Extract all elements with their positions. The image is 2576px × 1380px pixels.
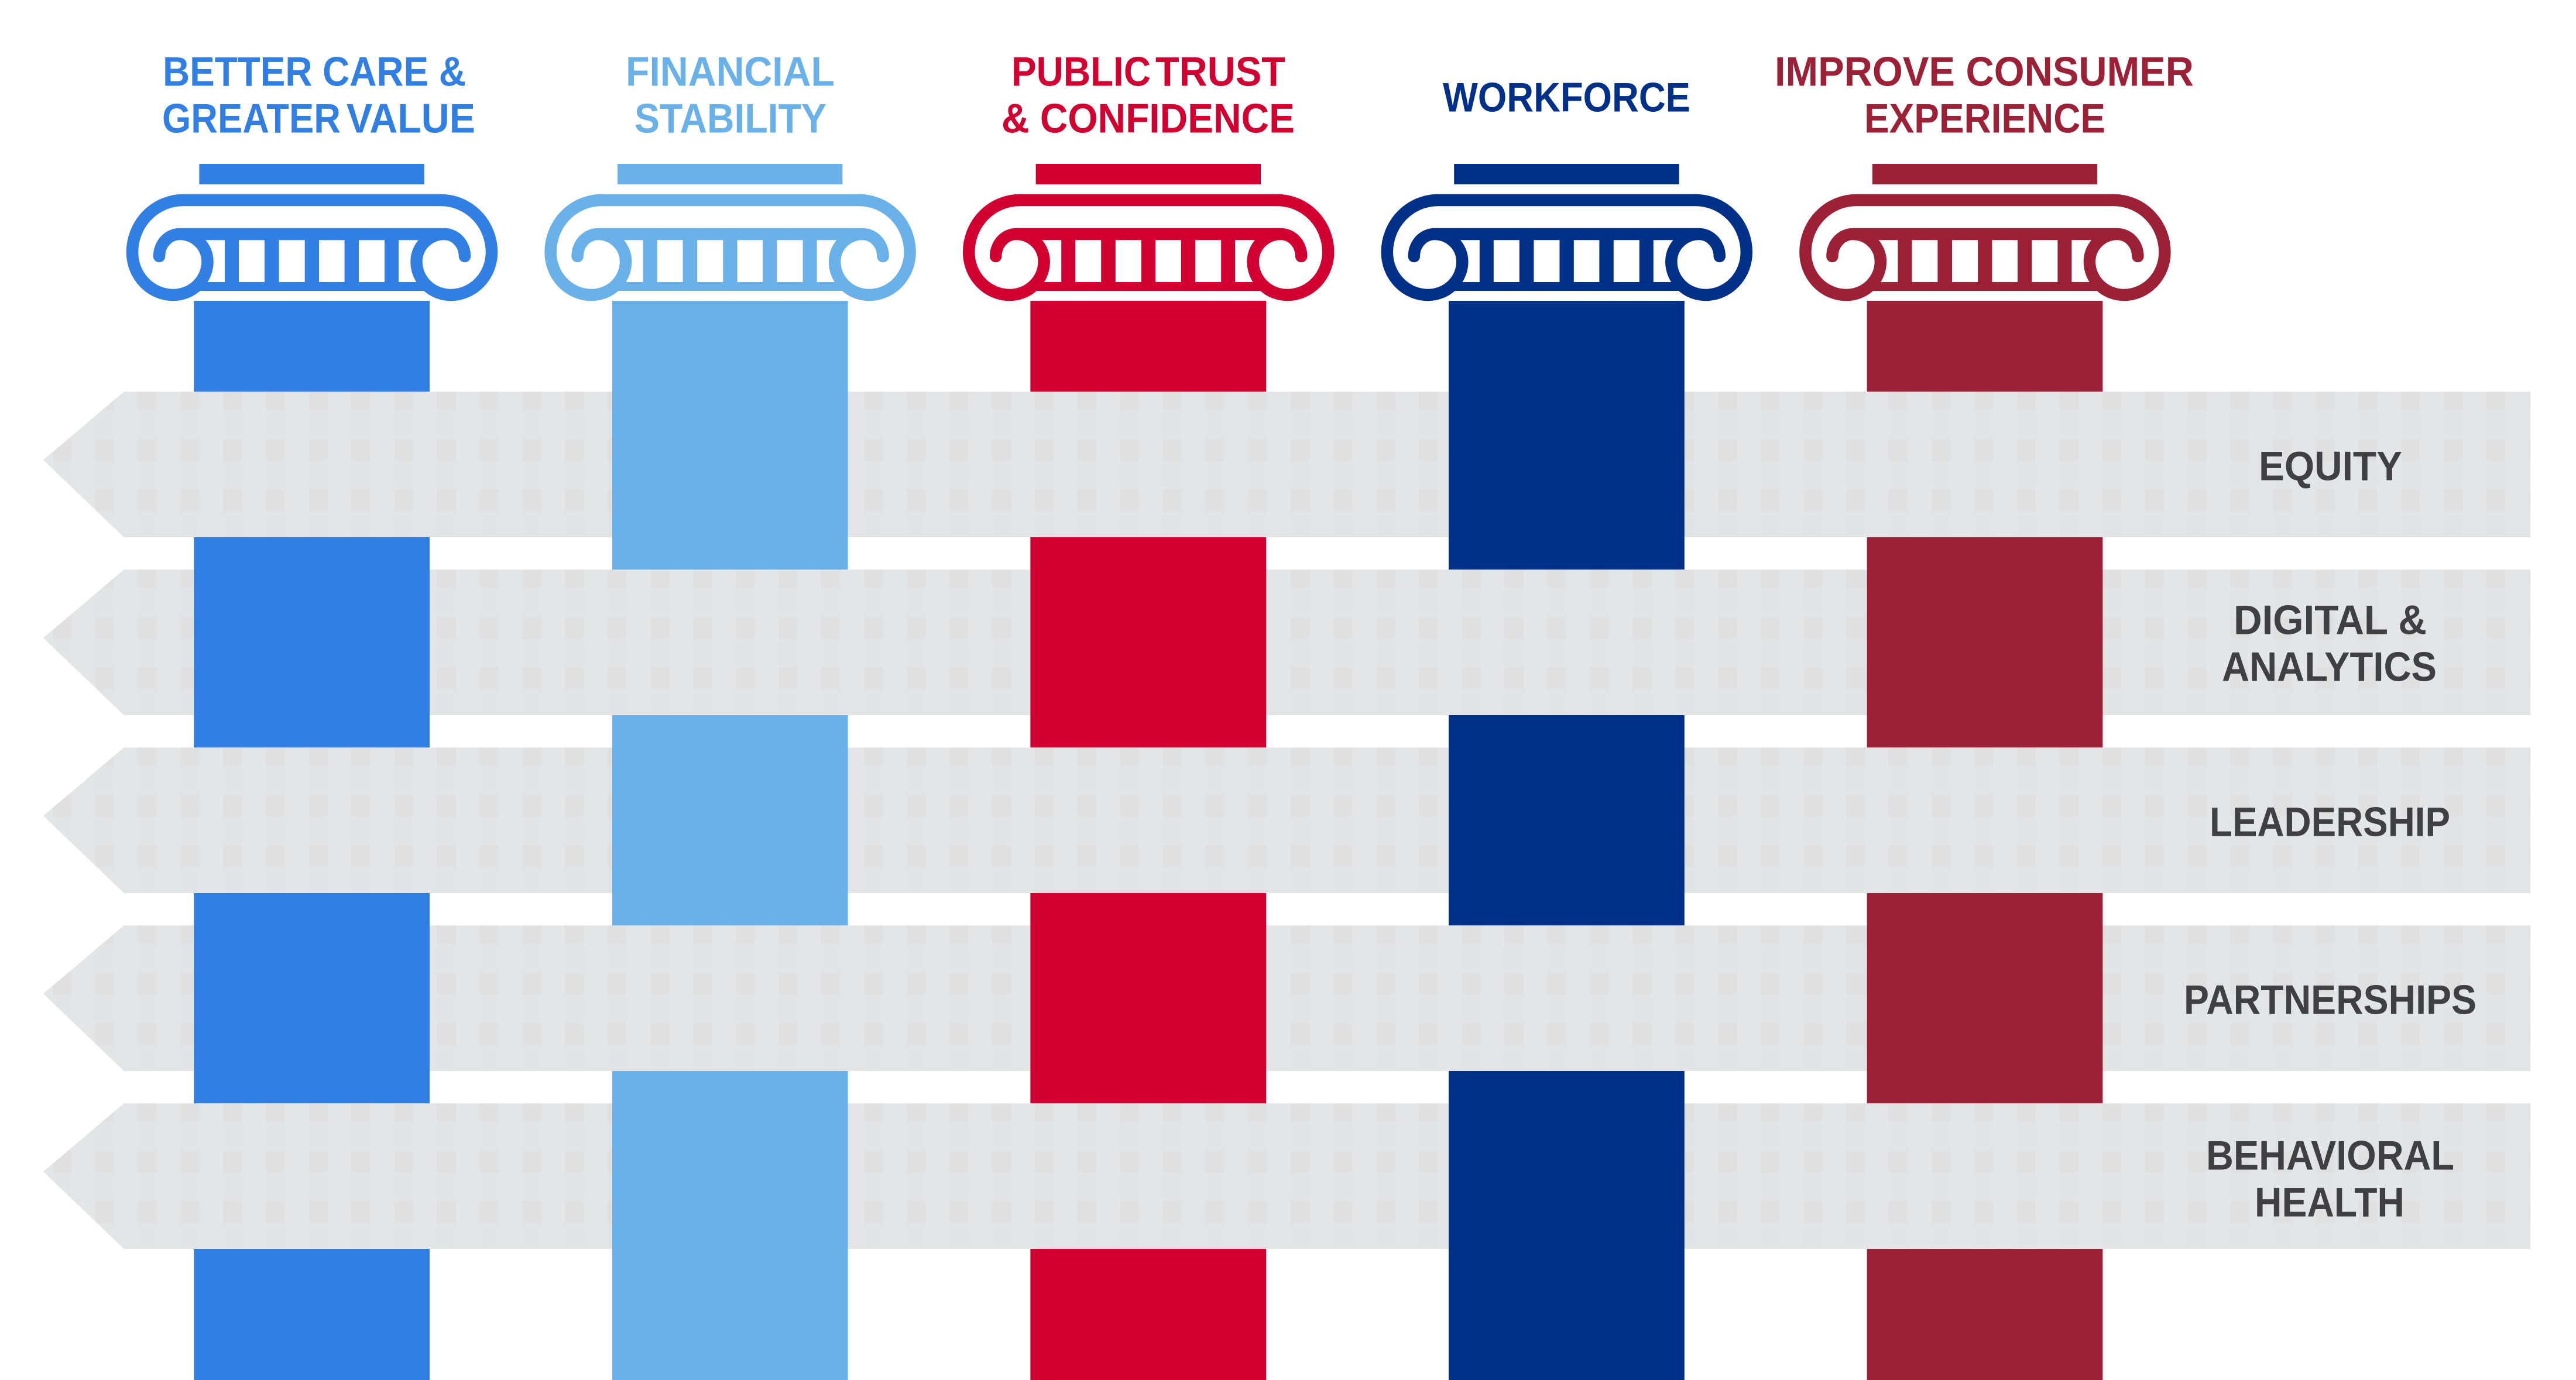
- column shaft segments: [194, 301, 430, 1380]
- icon: ionic capital: [132, 200, 492, 295]
- abacus bar: [618, 164, 842, 184]
- pillar: better care and greater value: [132, 48, 492, 1380]
- pillar: improve consumer experience: [1775, 48, 2194, 1380]
- band: behavioral health: BEHAVIORAL: [2206, 1132, 2454, 1178]
- heading: public trust and confidence: & CONFIDENCE: [1001, 95, 1295, 142]
- heading: better care and greater value: GREATER: [162, 95, 341, 142]
- pillar: public trust and confidence: [969, 48, 1328, 1380]
- band: partnerships: PARTNERSHIPS: [2184, 977, 2476, 1023]
- icon: ionic capital: [969, 200, 1328, 295]
- heading: better care and greater value: VALUE: [347, 95, 475, 142]
- heading: public trust and confidence: TRUST: [1155, 48, 1285, 95]
- column shaft segments: [1867, 301, 2102, 1380]
- band: equity: [43, 392, 2530, 537]
- column shaft segments: [1030, 301, 1266, 1380]
- band: leadership: LEADERSHIP: [2210, 799, 2450, 845]
- heading: workforce: WORKFORCE: [1443, 74, 1690, 121]
- band: digital and analytics: DIGITAL &: [2234, 597, 2427, 643]
- icon: ionic capital: [1387, 200, 1747, 295]
- abacus bar: [1872, 164, 2097, 184]
- heading: public trust and confidence: [1001, 48, 1295, 142]
- band: behavioral health: HEALTH: [2255, 1179, 2405, 1225]
- abacus bar: [1036, 164, 1261, 184]
- column shaft segments: [612, 301, 848, 1380]
- heading: improve consumer experience: IMPROVE CONSUMER: [1775, 48, 2194, 95]
- abacus bar: [1454, 164, 1679, 184]
- band: digital and analytics: ANALYTICS: [2222, 644, 2437, 689]
- heading: financial stability: STABILITY: [634, 95, 826, 142]
- abacus bar: [199, 164, 424, 184]
- icon: ionic capital: [551, 200, 910, 295]
- heading: public trust and confidence: PUBLIC: [1011, 48, 1151, 95]
- heading: improve consumer experience: EXPERIENCE: [1864, 95, 2105, 142]
- heading: improve consumer experience: [1775, 48, 2194, 142]
- heading: financial stability: FINANCIAL: [626, 48, 835, 95]
- band: equity: EQUITY: [2259, 443, 2402, 489]
- band: partnerships: [43, 925, 2530, 1071]
- pillar: financial stability: [551, 48, 910, 1380]
- icon: ionic capital: [1805, 200, 2165, 295]
- band: digital and analytics: [43, 569, 2530, 715]
- heading: financial stability: [626, 48, 835, 142]
- pillar: workforce: [1387, 74, 1747, 1380]
- column shaft segments: [1449, 301, 1685, 1380]
- band: leadership: [43, 747, 2530, 893]
- band: behavioral health: [43, 1103, 2530, 1249]
- heading: better care and greater value: BETTER CARE &: [163, 48, 466, 95]
- heading: better care and greater value: [162, 48, 475, 142]
